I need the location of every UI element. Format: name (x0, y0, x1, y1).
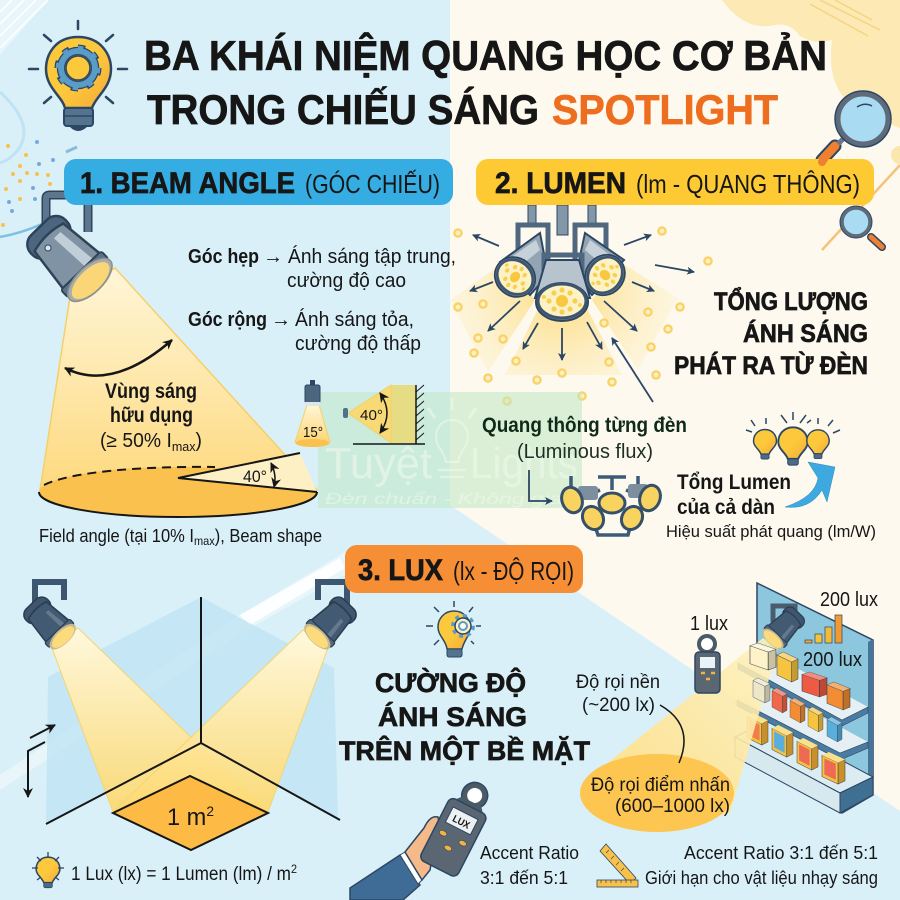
label: accent ratio limits: Giới hạn cho vật liệu nhạy sáng (645, 868, 878, 888)
shelf labels (576, 589, 878, 817)
light fan from lamps (450, 262, 678, 375)
shelf labels: 200 lux (803, 649, 862, 671)
panel: beam angle (19, 195, 456, 548)
lumen lower labels (482, 412, 876, 541)
narrow and wide angle notes: → (271, 309, 291, 331)
one square metre area: 2 (206, 803, 214, 819)
heading bar: beam angle: 1. BEAM ANGLE (80, 167, 295, 200)
title: SPOTLIGHT (552, 86, 778, 133)
narrow and wide angle notes: cường độ thấp (295, 333, 421, 355)
elbow arrow (529, 470, 552, 501)
shelf labels: Độ rọi nền (576, 672, 660, 693)
leader line (660, 705, 684, 763)
label: per-lamp flux: Quang thông từng đèn (482, 414, 687, 437)
label: total lumen: của cả dàn (677, 496, 775, 519)
lower shelf base (735, 721, 873, 813)
right lamp (300, 582, 361, 654)
meter: 1 lux (695, 636, 720, 693)
narrow and wide angle notes: Ánh sáng tập trung, (288, 245, 456, 268)
panel: lux illustration (19, 582, 361, 888)
narrow and wide angle notes: Ánh sáng tỏa, (295, 308, 414, 331)
shelf labels: 200 lux (820, 589, 878, 611)
narrow and wide angle notes: Góc hẹp (188, 246, 259, 268)
icon: small gear bulb (426, 601, 481, 657)
shelf labels: 1 lux (690, 613, 728, 635)
watermark: Tuyệt (325, 439, 432, 488)
beam footprint ellipse: 40° (243, 467, 267, 486)
magnifier handle tip over bar (822, 156, 826, 162)
shelf back panel (747, 583, 873, 813)
label: total lumen (666, 471, 876, 541)
one square metre area: 1 m (167, 804, 207, 831)
panel: lumen (450, 205, 868, 405)
label: total lumen: Hiệu suất phát quang (lm/W) (666, 522, 876, 541)
three spotlight cluster (487, 205, 633, 321)
blue growth arrow (785, 462, 835, 507)
beam from shelf lamp to accent area (583, 638, 778, 832)
small 40 degree lamp and wall (343, 385, 425, 444)
caption: field angle: ), Beam shape (215, 526, 322, 546)
watermark: Đèn chuẩn - Không gian (325, 490, 575, 508)
narrow and wide angle notes: cường độ cao (287, 270, 406, 292)
emission arrows (470, 235, 694, 402)
heading: illuminance: TRÊN MỘT BỀ MẶT (339, 735, 590, 766)
heading: total light output: TỔNG LƯỢNG (714, 286, 868, 316)
heading bar: lux (345, 545, 583, 593)
shelf bar chart (805, 615, 842, 643)
shelf labels: Độ rọi điểm nhấn (591, 775, 730, 796)
spotlight fixture (19, 195, 119, 309)
three bulbs (746, 412, 840, 465)
label: usable light zone: (≥ 50% I (100, 430, 174, 452)
label: usable light zone: max (172, 439, 196, 454)
icon: small magnifier (840, 206, 882, 247)
label: total lumen: Tổng Lumen (677, 471, 791, 494)
heading bar: beam angle (64, 159, 453, 205)
shelf labels: (~200 lx) (582, 695, 655, 716)
spotlight beam cone (40, 268, 317, 517)
heading: total light output (674, 286, 868, 380)
caption: field angle: max (194, 534, 215, 548)
label: usable light zone: ) (196, 430, 202, 452)
heading: illuminance: ÁNH SÁNG (378, 701, 527, 732)
accent ellipse (580, 754, 734, 832)
light dots (454, 227, 712, 405)
narrow and wide angle notes: Góc rộng (188, 309, 267, 331)
heading: illuminance: CƯỜNG ĐỘ (375, 667, 526, 698)
label: per-lamp flux (482, 414, 687, 463)
shelf 1 with products (738, 650, 868, 726)
icon: lightbulb with gear (29, 21, 127, 131)
shelf lamp (759, 603, 808, 653)
heading: illuminance (339, 667, 590, 766)
panel: retail shelf (576, 583, 878, 888)
title: TRONG CHIẾU SÁNG (147, 86, 539, 133)
heading bar: lumen: (lm - QUANG THÔNG) (636, 169, 860, 199)
shelf 2 with products (737, 686, 868, 760)
formula: 1 Lux (lx) = 1 Lumen (lm) / m (71, 864, 314, 885)
small 15 degree lamp: 15° (303, 424, 323, 441)
room walls (46, 597, 338, 824)
hand with lux meter (350, 774, 499, 900)
small 40 degree lamp and wall: 40° (360, 407, 383, 424)
heading bar: lumen: 2. LUMEN (495, 167, 626, 200)
narrow and wide angle notes: → (263, 246, 283, 268)
left and right light cones (52, 628, 328, 812)
label: usable light zone: Vùng sáng (105, 380, 197, 403)
label: usable light zone: hữu dụng (110, 404, 193, 427)
caption: field angle: Field angle (tại 10% I (39, 526, 208, 546)
one square metre area (113, 776, 268, 850)
hand with lux meter: LUX (450, 814, 472, 832)
beam footprint ellipse (39, 453, 317, 517)
narrow and wide angle notes (188, 245, 456, 355)
formula: 2 (291, 862, 297, 876)
label: usable light zone (100, 380, 202, 454)
direction arrows (28, 725, 55, 797)
room lines (46, 597, 340, 824)
heading bar: lumen (476, 159, 874, 205)
title (144, 31, 827, 133)
panel: lux center (339, 601, 590, 900)
heading bar: lux: 3. LUX (358, 554, 443, 587)
heading: total light output: ÁNH SÁNG (743, 319, 868, 348)
small 15 degree lamp (295, 380, 330, 447)
label: accent ratio limits (645, 843, 878, 888)
faded products in the beam (750, 643, 776, 703)
small fixture array (558, 476, 664, 535)
left lamp (19, 582, 80, 654)
beam angle arrow (65, 340, 172, 376)
shelf labels: (600–1000 lx) (615, 796, 730, 817)
heading bar: beam angle: (GÓC CHIẾU) (305, 169, 440, 199)
label: accent ratio: 3:1 đến 5:1 (480, 868, 568, 888)
label: accent ratio limits: Accent Ratio 3:1 đến 5:1 (684, 843, 878, 863)
label: accent ratio (480, 843, 579, 888)
products (747, 652, 850, 784)
watermark (318, 392, 582, 508)
formula (32, 852, 297, 888)
label: accent ratio: Accent Ratio (480, 843, 579, 863)
label: per-lamp flux: (Luminous flux) (517, 441, 653, 463)
title: BA KHÁI NIỆM QUANG HỌC CƠ BẢN (144, 31, 827, 79)
watermark: Lights (470, 439, 578, 488)
icon: large magnifier (822, 91, 891, 160)
heading bar: lux: (lx - ĐỘ RỌI) (453, 556, 574, 586)
heading: total light output: PHÁT RA TỪ ĐÈN (674, 350, 868, 380)
icon: ruler (597, 844, 638, 887)
